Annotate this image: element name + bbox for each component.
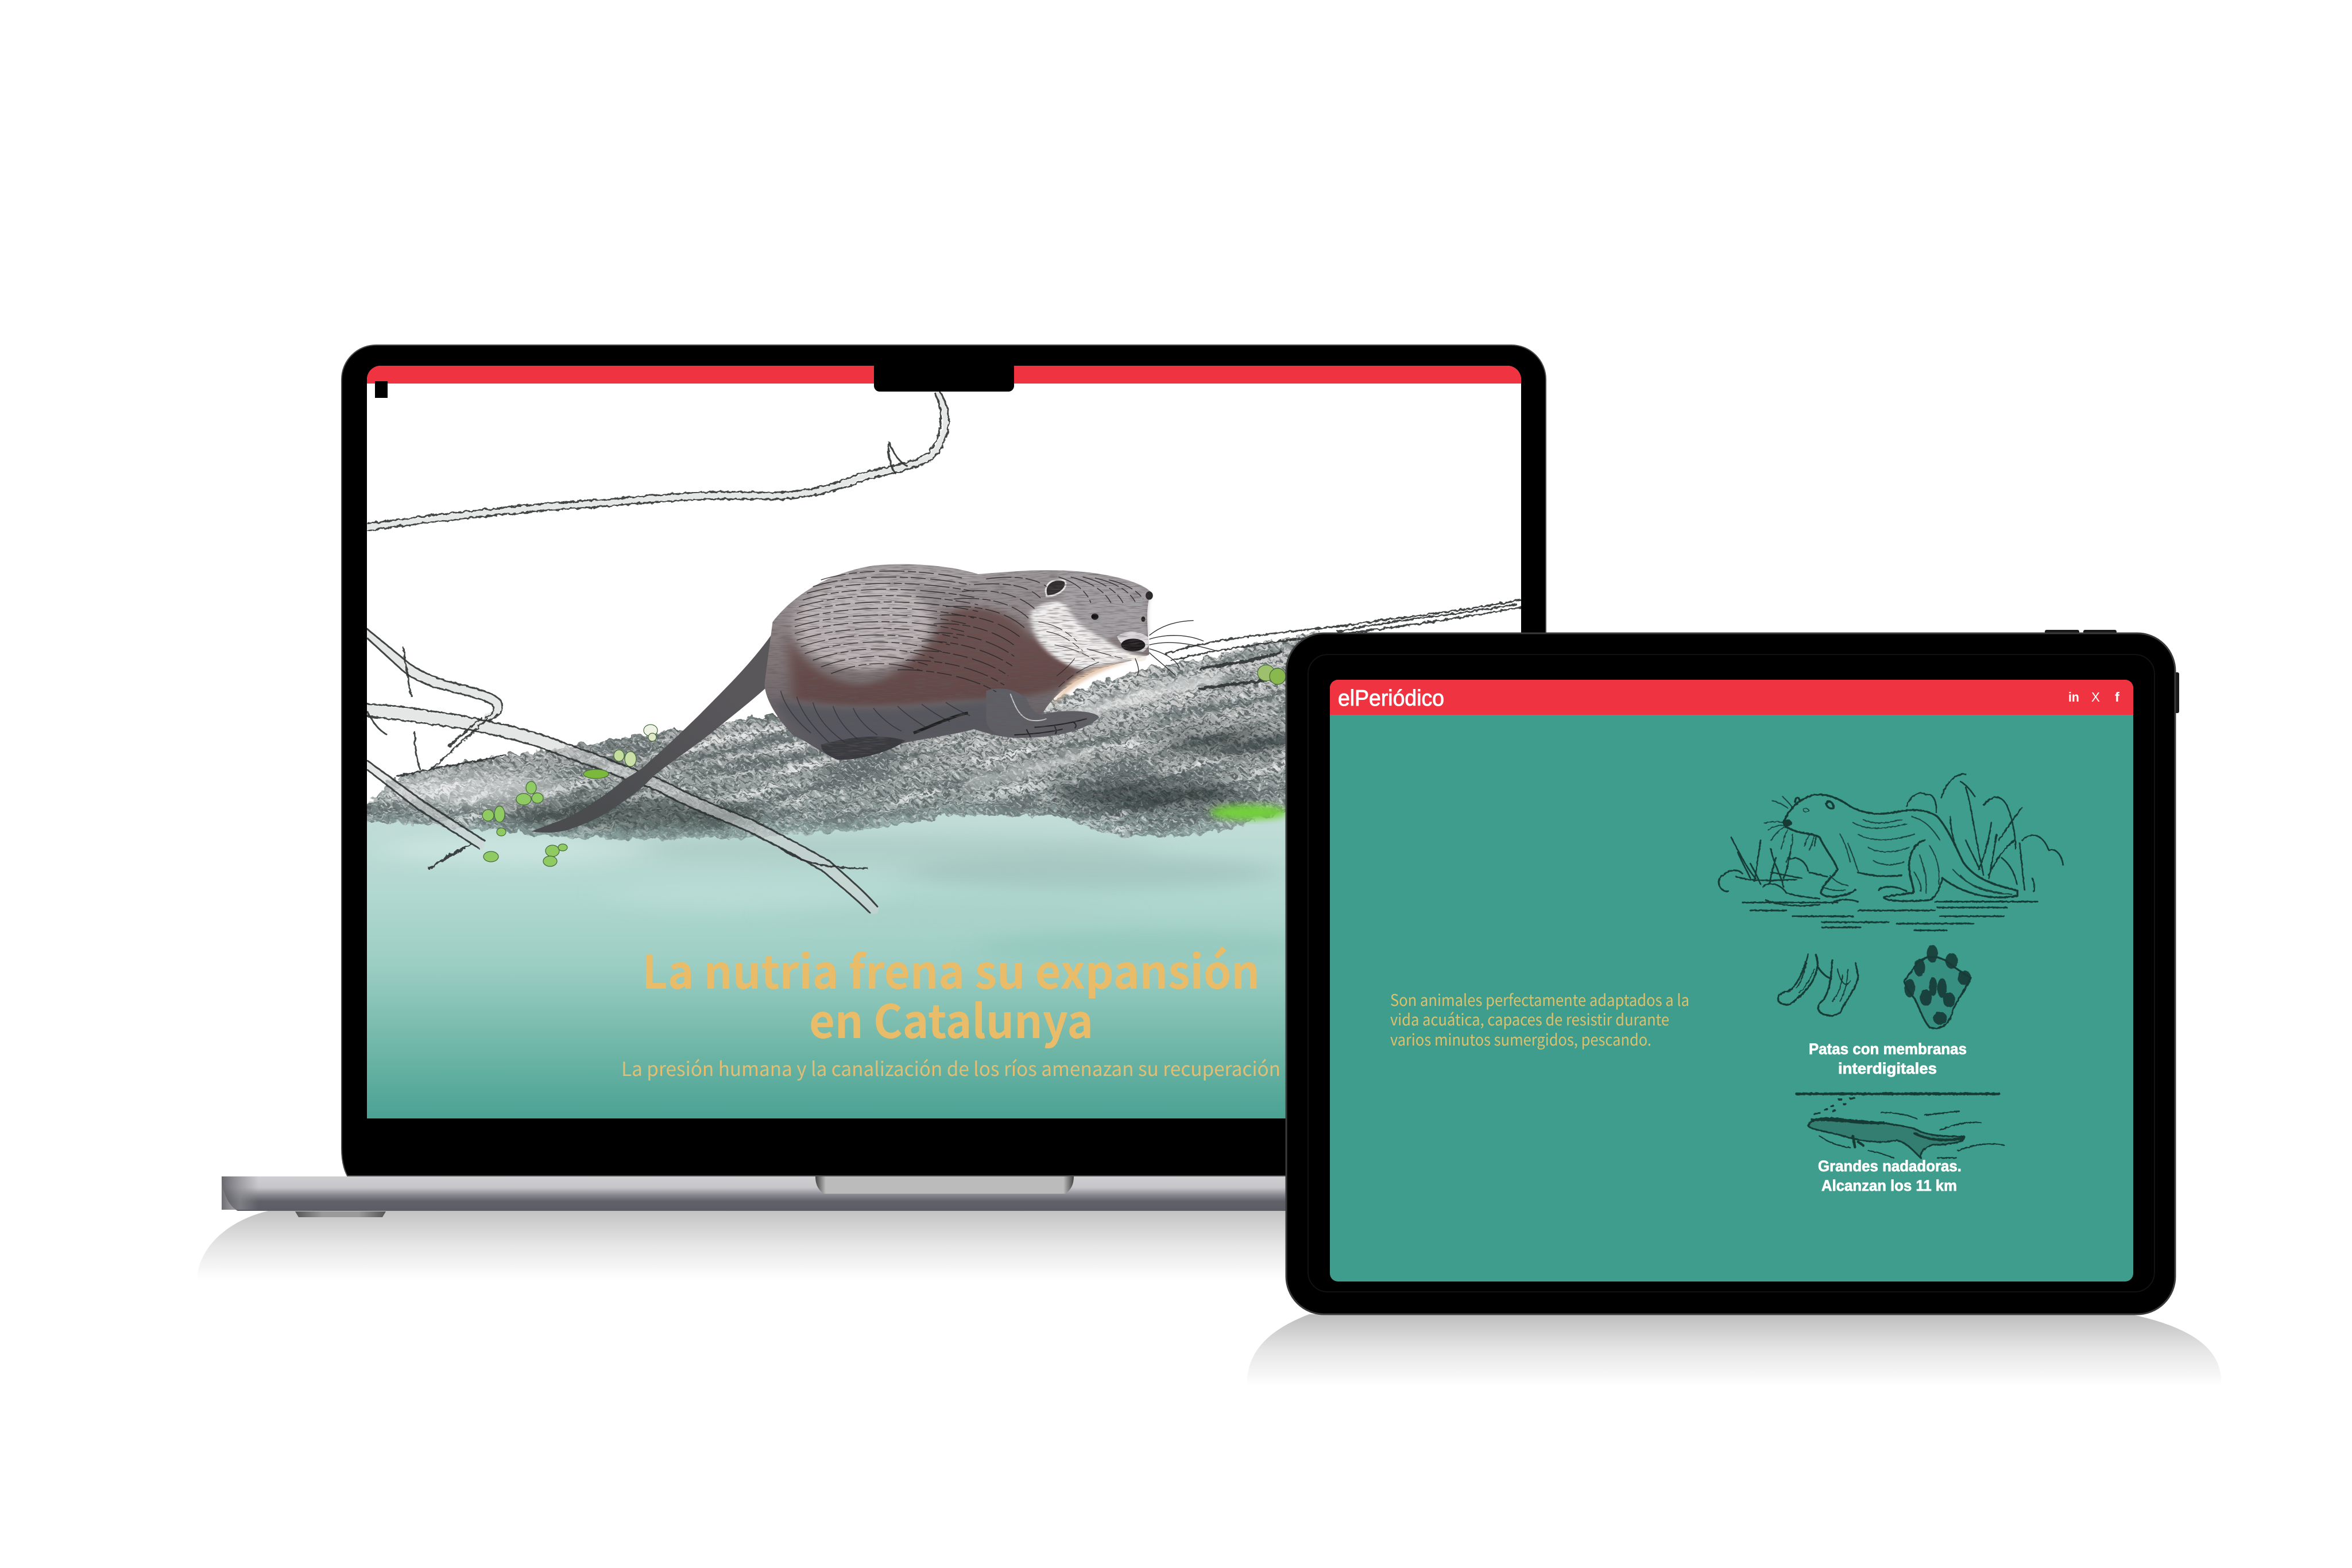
tablet buttons (2045, 630, 2179, 713)
otter body (764, 564, 1151, 759)
paragraph: vida acuática, capaces de resistir durante (1390, 1008, 1669, 1031)
title: en Catalunya (809, 985, 1093, 1052)
illustration: log (367, 630, 1321, 842)
laptop camera notch (874, 362, 1014, 392)
caption: webbed feet: interdigitales (1838, 1060, 1937, 1077)
line drawings (1719, 774, 2063, 1158)
caption: webbed feet (1809, 1040, 1967, 1077)
otter coat colouring (773, 567, 1079, 756)
title (642, 936, 1260, 1052)
laptop hinge notch (815, 1176, 1074, 1194)
drawing: otter on riverbank (1765, 795, 2017, 901)
drawing: swimming otter (1797, 1094, 2004, 1158)
social icons (2068, 690, 2119, 704)
tablet shadow (1247, 1314, 2221, 1387)
caption: great swimmers (1818, 1157, 1962, 1194)
laptop screen (260, 366, 1521, 1118)
paragraph (1390, 988, 1689, 1051)
social icons: X (2091, 690, 2100, 704)
otter chest (1053, 661, 1131, 706)
paragraph: varios minutos sumergidos, pescando. (1390, 1028, 1651, 1051)
caption: great swimmers: Grandes nadadoras. (1818, 1157, 1962, 1175)
illustration: river water (367, 792, 1321, 1118)
drawing: otter legs (1778, 954, 1858, 1016)
drawing: paw print (1904, 945, 1971, 1028)
illustration: otter tail (531, 626, 777, 833)
red header bar (367, 366, 1521, 384)
tablet screen (1330, 680, 2133, 1281)
social icons: f (2115, 690, 2119, 704)
laptop shadow (197, 1211, 1321, 1280)
illustration: leaves (482, 665, 1288, 866)
otter face (1063, 574, 1149, 643)
drawing: reeds, bushes and water (1719, 774, 2063, 930)
mockup scene (199, 344, 2221, 1375)
black tab marker (375, 381, 388, 398)
tablet inner rim (1308, 655, 2154, 1292)
branch cores (368, 393, 945, 909)
tablet body (1286, 633, 2175, 1314)
title: La nutria frena su expansión (642, 936, 1260, 1002)
laptop base (222, 1176, 1378, 1217)
illustration: otter (764, 564, 1216, 760)
branch outlines (368, 393, 1521, 913)
otter fur texture (764, 564, 1151, 759)
paragraph: Son animales perfectamente adaptados a la (1390, 988, 1689, 1011)
social icons: in (2068, 690, 2079, 704)
otter foreleg (986, 688, 1099, 738)
laptop foot (295, 1211, 386, 1217)
tablet header bar (1330, 680, 2133, 715)
logo: elPeriódico (1338, 686, 1444, 711)
otter whiskers (1135, 621, 1216, 676)
otter hind paw (821, 737, 906, 760)
laptop lid (342, 345, 1546, 1176)
caption: great swimmers: Alcanzan los 11 km (1821, 1177, 1957, 1194)
otter fur strokes (795, 571, 1143, 692)
caption: webbed feet: Patas con membranas (1809, 1040, 1967, 1058)
illustration: branches (368, 393, 1521, 913)
subtitle: La presión humana y la canalización de los ríos amenazan su recuperación (621, 1054, 1281, 1082)
